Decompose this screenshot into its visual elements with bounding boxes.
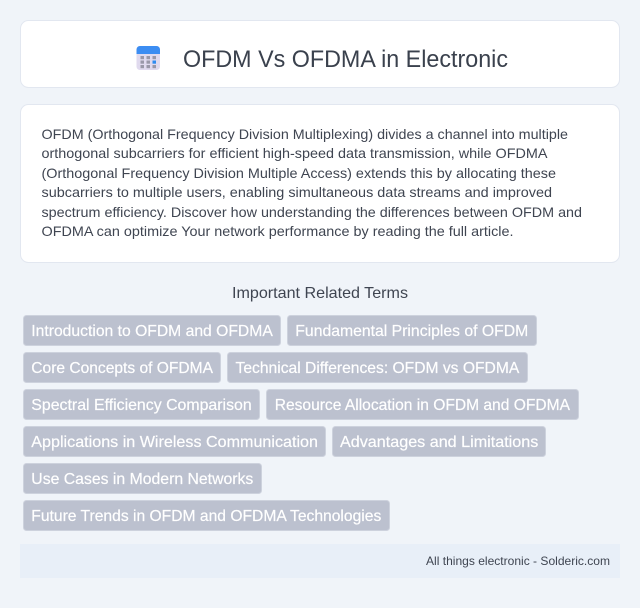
tag: introduction xyxy=(24,316,280,346)
tag: resource allocation xyxy=(266,390,578,420)
tag: introduction: Introduction to OFDM and OFDMA xyxy=(31,323,273,340)
tag: fundamental principles: Fundamental Principles of OFDM xyxy=(295,323,528,340)
footer text: All things electronic - Solderic.com xyxy=(426,554,610,568)
footer xyxy=(20,544,620,578)
tag: applications xyxy=(24,426,326,456)
header card xyxy=(20,20,620,88)
icon: calendar xyxy=(136,46,160,70)
tag: technical differences: Technical Differences: OFDM vs OFDMA xyxy=(236,360,520,377)
tag: use cases: Use Cases in Modern Networks xyxy=(31,471,253,488)
tag: core concepts xyxy=(24,352,220,382)
tag: technical differences xyxy=(228,352,528,382)
tag: future trends: Future Trends in OFDM and OFDMA Technologies xyxy=(31,508,381,525)
text block: description: (Orthogonal Frequency Division Multiple Access) extends this by allocating these xyxy=(42,165,556,181)
text block: description: orthogonal subcarriers for efficient high-speed data transmission, while OFDMA xyxy=(42,145,548,161)
text block: description: OFDMA can optimize Your network performance by reading the full article. xyxy=(42,223,514,239)
tag: fundamental principles xyxy=(288,316,536,346)
tag: spectral efficiency: Spectral Efficiency Comparison xyxy=(31,397,252,414)
text block: description: spectrum efficiency. Discover how understanding the differences between OFDM and xyxy=(42,204,582,220)
tag: resource allocation: Resource Allocation in OFDM and OFDMA xyxy=(275,397,570,414)
tag: advantages: Advantages and Limitations xyxy=(340,434,538,451)
text block: description: subcarriers to multiple users, enabling simultaneous data streams and improved xyxy=(42,184,552,200)
tag: core concepts: Core Concepts of OFDMA xyxy=(31,360,213,377)
tag: use cases xyxy=(24,464,262,494)
heading: important related terms: Important Related Terms xyxy=(232,285,408,302)
tag: advantages xyxy=(332,426,546,456)
panel: description xyxy=(20,104,620,262)
title: OFDM Vs OFDMA in Electronic xyxy=(183,46,508,73)
text block: description: OFDM (Orthogonal Frequency Division Multiplexing) divides a channel into multiple xyxy=(42,126,568,142)
tag: future trends xyxy=(24,500,390,530)
tag: spectral efficiency xyxy=(24,390,260,420)
tag: applications: Applications in Wireless Communication xyxy=(31,434,318,451)
text block: description xyxy=(42,126,582,239)
tag list xyxy=(24,316,578,530)
